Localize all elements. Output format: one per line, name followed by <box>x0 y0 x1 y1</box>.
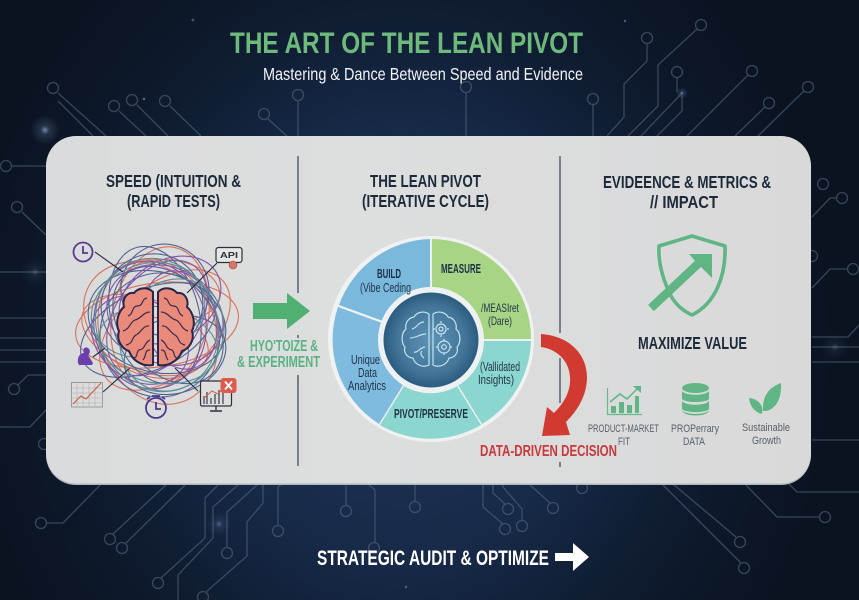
segment: analytics <box>333 307 403 424</box>
icon: database <box>682 383 709 416</box>
donut cycle <box>328 236 534 442</box>
benefit labels <box>588 422 790 448</box>
segment labels: Data <box>358 365 378 380</box>
panel: speed <box>62 171 253 421</box>
segment labels: (Vibe Ceding <box>360 280 411 295</box>
heading: speed: SPEED (INTUITION & <box>106 171 241 191</box>
icon: shield with arrow <box>651 236 725 315</box>
segment: measure <box>432 239 531 339</box>
label: data-driven decision: DATA-DRIVEN DECISION <box>480 443 617 460</box>
icon: person <box>78 347 93 365</box>
benefit labels: Sustainable <box>742 422 790 434</box>
icon: clock bottom <box>146 396 166 418</box>
panel: lean pivot <box>328 171 534 442</box>
heading: speed <box>106 171 241 211</box>
icon: clock top <box>74 242 92 262</box>
arrow: footer <box>555 543 589 571</box>
icon: brain and gears <box>402 312 460 366</box>
donut core <box>378 287 484 393</box>
arrow: hypothesize <box>253 293 310 329</box>
arrow: data-driven curved <box>541 334 587 436</box>
label: maximize value: MAXIMIZE VALUE <box>638 333 747 353</box>
heading: lean pivot: (ITERATIVE CYCLE) <box>362 191 489 211</box>
heading: evidence: // IMPACT <box>650 192 718 212</box>
label: hypothesize and experiment: HYO'TOIZE & <box>250 338 318 355</box>
segment: pivot <box>380 386 481 439</box>
segment labels: Insights) <box>478 372 514 387</box>
benefit labels: DATA <box>683 436 706 448</box>
tangled scribble lines <box>62 233 253 421</box>
icon: market fit chart <box>608 386 642 414</box>
benefit labels: PRODUCT-MARKET <box>588 423 659 435</box>
heading: lean pivot: THE LEAN PIVOT <box>370 171 481 191</box>
icon: rising chart grid <box>71 382 102 407</box>
segment labels: PIVOT/PRESERVE <box>394 407 468 421</box>
icon: monitor with error <box>200 378 236 411</box>
benefit labels: FIT <box>618 436 630 448</box>
segment: validated insights <box>458 341 531 424</box>
benefit labels: PROPerrary <box>671 423 719 435</box>
heading: lean pivot <box>362 171 489 211</box>
main panel <box>46 136 811 485</box>
footer label: STRATEGIC AUDIT & OPTIMIZE <box>317 547 549 570</box>
segment labels: (Vallidated <box>480 359 520 374</box>
icon: API box: API <box>220 250 238 260</box>
segment labels: BUILD <box>377 267 401 281</box>
icon: API box <box>216 248 242 269</box>
connector lines <box>93 252 217 392</box>
icon: brain <box>117 288 194 365</box>
segment labels: /ΜΕΑSIret <box>481 301 519 315</box>
label: hypothesize and experiment <box>237 338 320 371</box>
segment labels: MEASURE <box>441 262 481 276</box>
segment: build <box>339 239 430 321</box>
heading: speed: (RAPID TESTS) <box>127 191 220 211</box>
subtitle: Mastering & Dance Between Speed and Evidence <box>263 64 583 84</box>
segment labels: (Dare) <box>488 314 512 328</box>
benefit labels: Growth <box>752 435 781 447</box>
dividers <box>298 156 560 467</box>
segment labels <box>348 262 520 421</box>
heading: evidence: EVIDEENCE & METRICS & <box>603 172 771 192</box>
segment labels: Analytics <box>348 378 386 393</box>
label: hypothesize and experiment: & EXPERIMENT <box>237 354 320 371</box>
title: THE ART OF THE LEAN PIVOT <box>230 27 583 60</box>
icon: leaf <box>749 383 781 414</box>
heading: evidence <box>603 172 771 212</box>
segment labels: Unique <box>351 352 380 367</box>
panel: evidence <box>588 172 790 448</box>
